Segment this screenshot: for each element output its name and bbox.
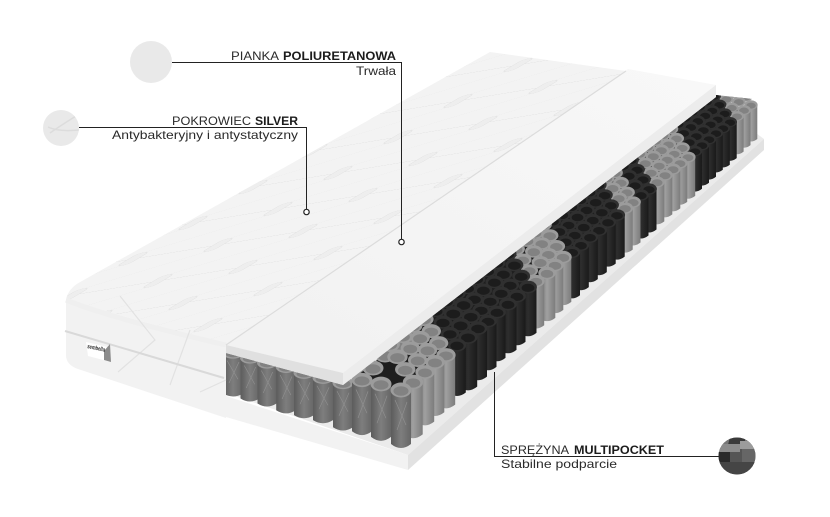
callout: pianka poliuretanowa: Trwała [356,64,396,78]
callout: pianka poliuretanowa: POLIURETANOWA [283,49,396,63]
swatch: cover [43,110,79,146]
callout: sprezyna multipocket: SPRĘŻYNA [501,443,569,457]
swatch: foam [130,41,172,83]
brand tag [86,342,111,362]
callout: sprezyna multipocket [494,372,756,475]
callout: pianka poliuretanowa: PIANKA [231,49,279,63]
callout: pokrowiec silver [43,110,309,215]
brand tag: sembella [87,344,106,354]
callout: pokrowiec silver: SILVER [255,114,298,128]
swatch: springs [718,437,756,475]
foam layer [226,69,716,385]
callout: pokrowiec silver: Antybakteryjny i antystatyczny [112,128,298,142]
callout: sprezyna multipocket: MULTIPOCKET [574,443,665,457]
base foam layer [226,125,764,470]
callout: pokrowiec silver: POKROWIEC [172,114,251,128]
pocket springs [222,76,758,448]
quilted cover [65,52,626,418]
callout: pianka poliuretanowa [130,41,404,245]
callout: sprezyna multipocket: Stabilne podparcie [501,457,617,471]
